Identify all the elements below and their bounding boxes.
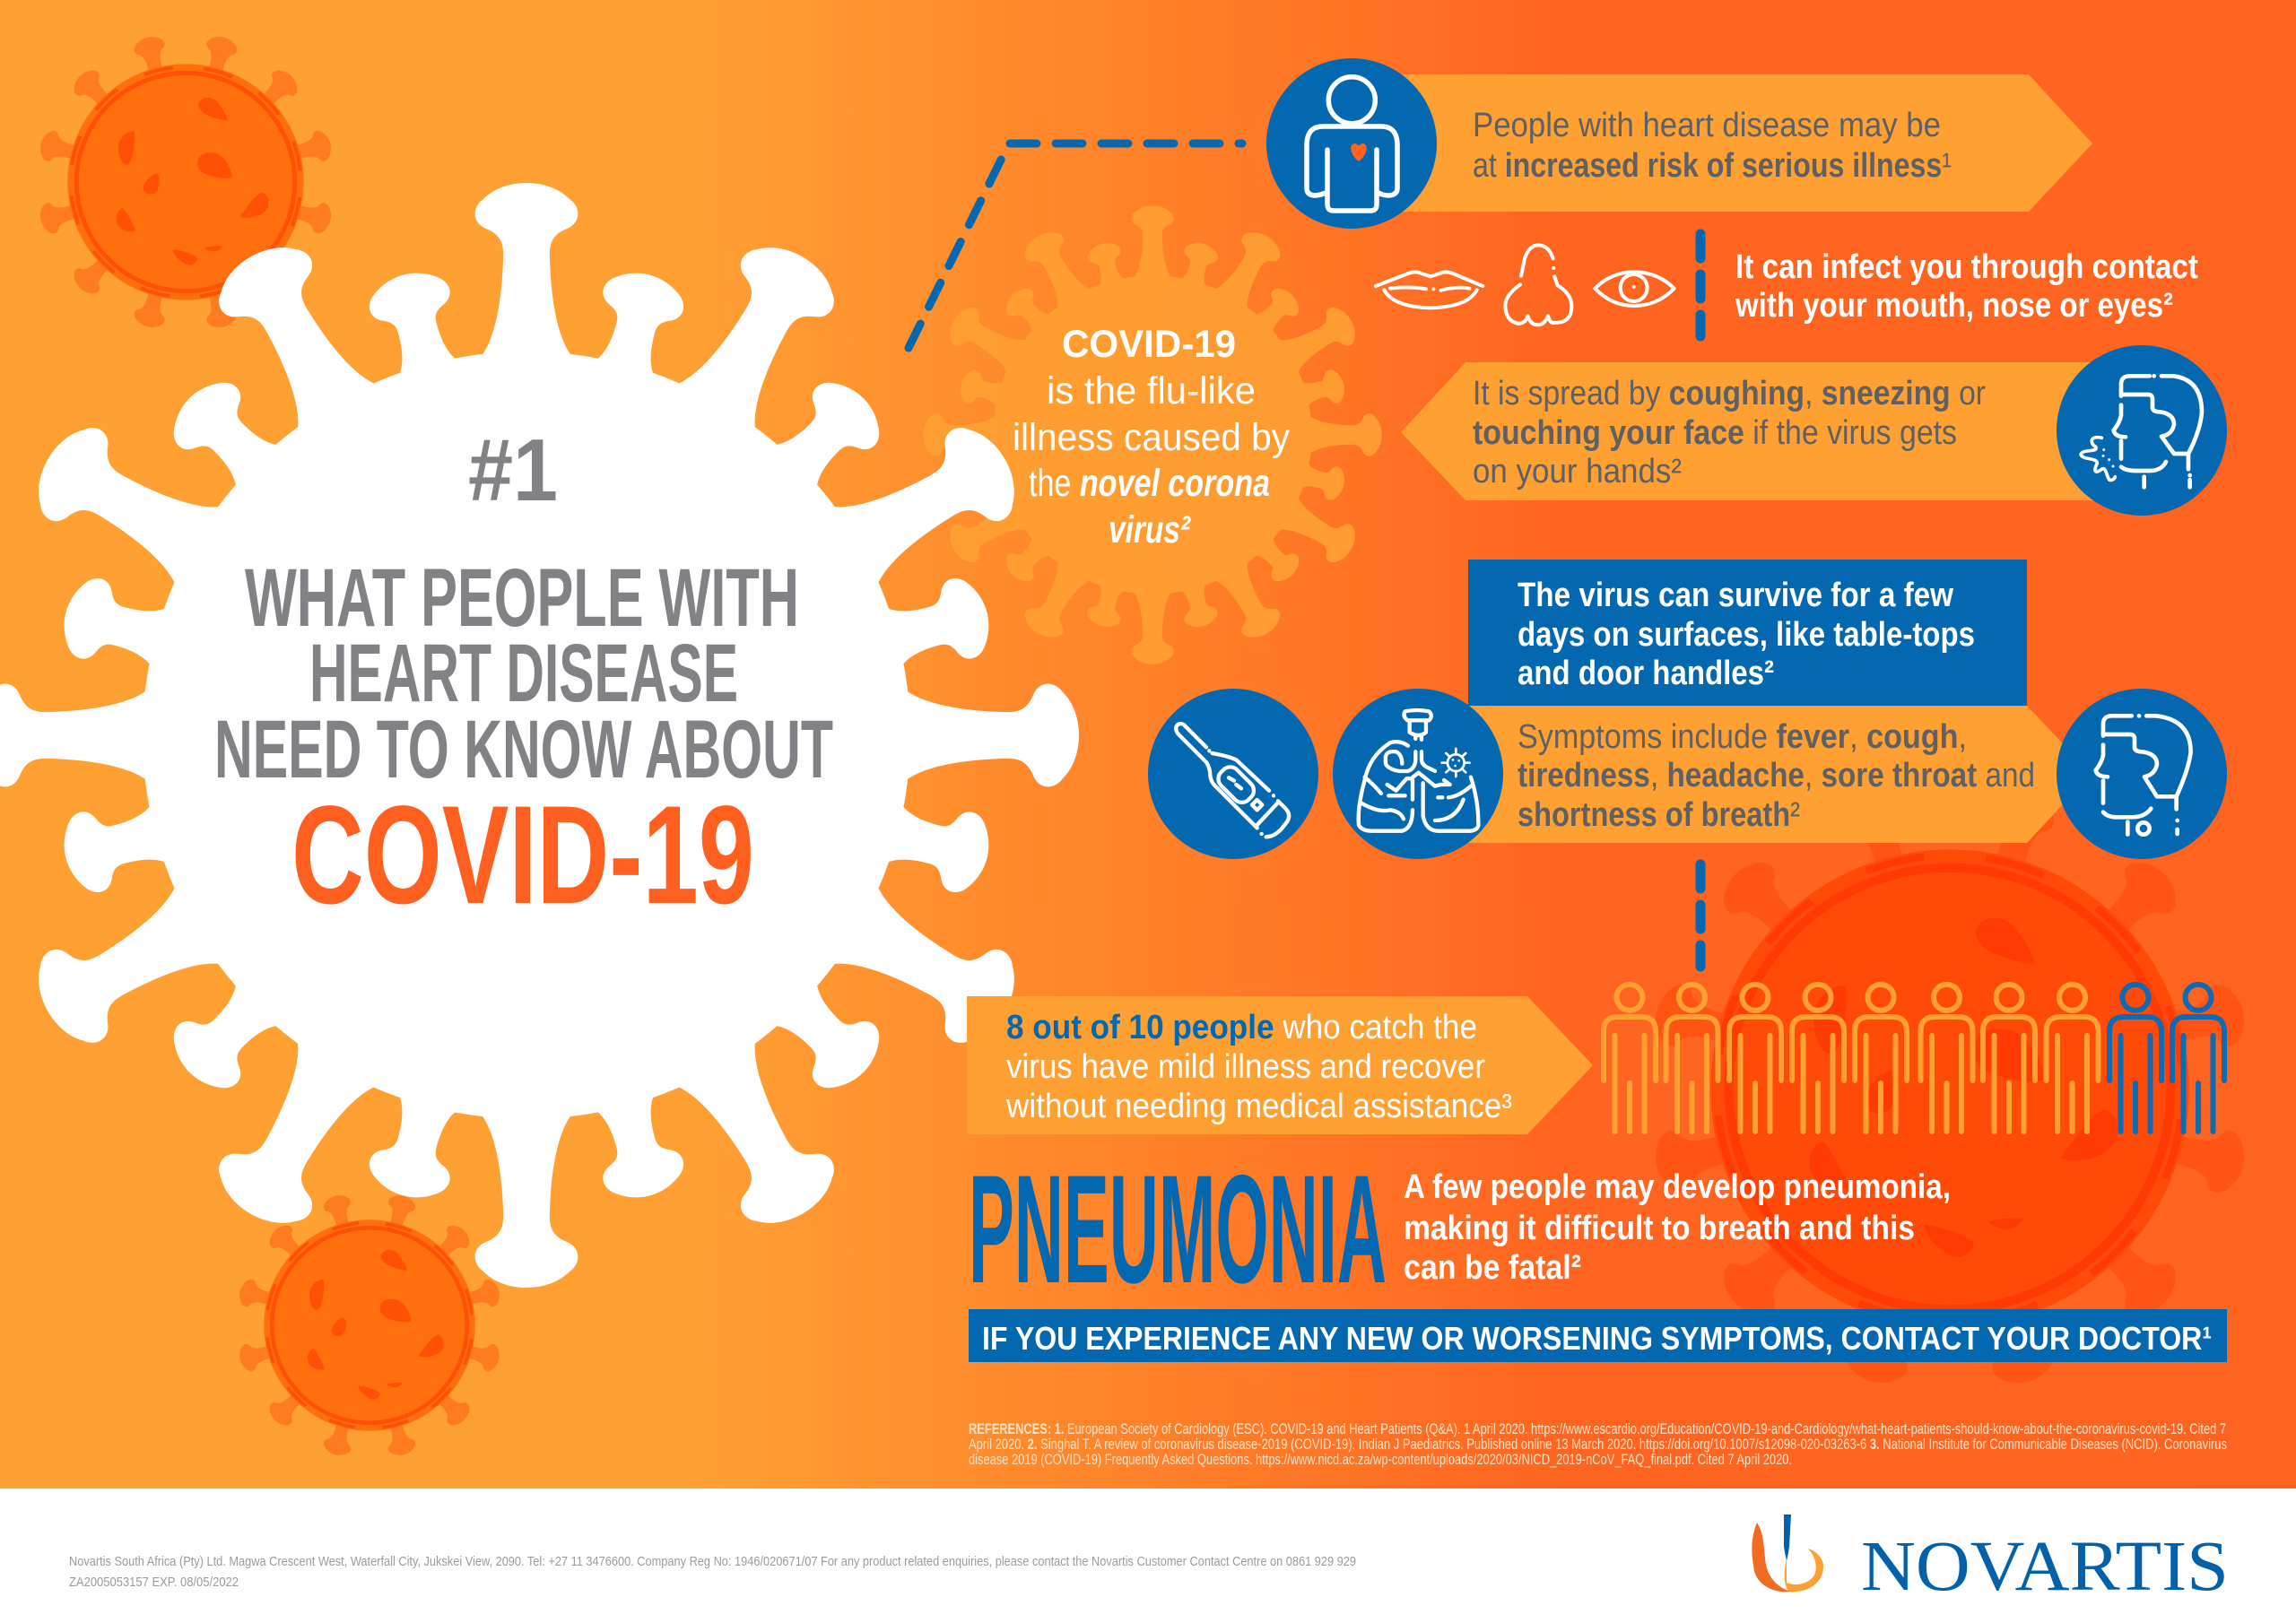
text line 3: shortness of breath² <box>1518 796 1800 834</box>
text line 1: It can infect you through contact <box>1735 248 2198 286</box>
footer legal text: ZA2005053157 EXP. 08/05/2022 <box>69 1575 239 1590</box>
panel: infection routes <box>1376 234 2198 336</box>
arrow banner <box>1399 74 2092 212</box>
footer white band <box>0 1488 2296 1623</box>
definition line 1: is the flu-like <box>1047 369 1256 412</box>
icon: person with heart <box>1266 58 1437 229</box>
title line 2: HEART DISEASE <box>309 628 738 719</box>
text line 2: virus have mild illness and recover <box>1006 1048 1485 1086</box>
icon: eye <box>1595 272 1674 306</box>
text line 2: touching your face if the virus gets <box>1473 414 1957 452</box>
pneumonia text line 1: A few people may develop pneumonia, <box>1404 1168 1951 1206</box>
blue box <box>1468 560 2027 706</box>
text line 1: The virus can survive for a few <box>1518 577 1953 614</box>
panel: symptoms <box>1148 689 2227 859</box>
arrow banner <box>1401 362 2099 500</box>
icon: head profile <box>2057 689 2227 859</box>
call-to-action banner <box>969 1309 2227 1362</box>
wordmark: NOVARTIS <box>1861 1528 2229 1606</box>
title line 4: COVID-19: COVID-19 <box>291 777 754 933</box>
dashed divider above people <box>1695 864 1706 967</box>
dashed connector from virus to heart icon <box>909 143 1242 348</box>
arrow banner <box>1468 706 2092 843</box>
panel: virus survival on surfaces <box>1468 560 2027 706</box>
title number: #1 <box>468 421 558 519</box>
title line 1: WHAT PEOPLE WITH <box>245 552 799 644</box>
text line 1: 8 out of 10 people who catch the <box>1006 1009 1477 1046</box>
arrow banner <box>967 996 1593 1134</box>
footer legal text <box>69 1554 1356 1590</box>
icon: lungs with virus <box>1333 689 1503 859</box>
references: April 2020. 2. Singhal T. A review of coronavirus disease-2019 (COVID-19). Indian J Paediatrics. Published online 13 March 2020. https://doi.org/10.1007/s12098-020-03263-6 3. National Institute for Communicable Diseases (NCID). Coronavirus <box>969 1436 2227 1453</box>
icon: large virus behind lower right content <box>1648 787 2251 1390</box>
icon: small virus bottom left <box>237 1193 502 1458</box>
panel: how it spreads <box>1401 345 2227 516</box>
text line 2: at increased risk of serious illness¹ <box>1473 147 1952 185</box>
icon: flame <box>1752 1515 1823 1592</box>
icon: coughing head <box>2057 345 2227 516</box>
title line 3: NEED TO KNOW ABOUT <box>214 704 833 795</box>
text line 1: People with heart disease may be <box>1473 107 1941 144</box>
logo: Novartis <box>1752 1515 2229 1606</box>
references <box>969 1421 2227 1468</box>
definition line 2: illness caused by <box>1013 416 1290 459</box>
panel: pneumonia: PNEUMONIA <box>969 1143 1387 1315</box>
text line 2: days on surfaces, like table-tops <box>1518 616 1975 654</box>
text line 1: Symptoms include fever, cough, <box>1518 718 1967 756</box>
definition line 4: virus² <box>1109 508 1191 551</box>
title block <box>214 421 833 933</box>
text line 3: without needing medical assistance³ <box>1005 1088 1512 1125</box>
panel: 8 out of 10 people <box>967 996 1593 1134</box>
pneumonia text line 2: making it difficult to breath and this <box>1404 1210 1915 1247</box>
panel: heart disease risk <box>1266 58 2092 229</box>
footer legal text: Novartis South Africa (Pty) Ltd. Magwa Crescent West, Waterfall City, Jukskei View, 2090. Tel: +27 11 3476600. Company Reg No: 1946/020671/07 For any product related enquiries, please contact the Novartis Customer Contact Centre on 0861 929 929 <box>69 1554 1356 1569</box>
text line 2: tiredness, headache, sore throat and <box>1518 757 2035 794</box>
text line 2: with your mouth, nose or eyes² <box>1735 287 2173 325</box>
icon: mouth <box>1376 272 1483 308</box>
icon: nose <box>1505 245 1571 325</box>
dashed divider <box>1695 234 1706 336</box>
icon: small virus top left <box>37 33 335 331</box>
pictogram: 8 orange and 2 blue people <box>1604 985 2224 1132</box>
definition line 3: the novel corona <box>1029 462 1270 505</box>
references: disease 2019 (COVID-19) Frequently Asked Questions. https://www.nicd.ac.za/wp-content/uploads/2020/03/NICD_2019-nCoV_FAQ_final.pdf. Cited 7 April 2020. <box>969 1452 1792 1468</box>
text line 1: It is spread by coughing, sneezing or <box>1473 375 1986 412</box>
text line 3: and door handles² <box>1518 655 1774 692</box>
icon: orange virus behind COVID-19 definition <box>923 205 1382 664</box>
pneumonia text line 3: can be fatal² <box>1404 1249 1581 1287</box>
definition text <box>1013 323 1290 551</box>
icon: thermometer <box>1148 689 1318 859</box>
COVID-19 heading: COVID-19 <box>1062 323 1236 366</box>
text line 3: on your hands² <box>1473 453 1682 490</box>
icon: large white virus <box>0 183 1079 1288</box>
